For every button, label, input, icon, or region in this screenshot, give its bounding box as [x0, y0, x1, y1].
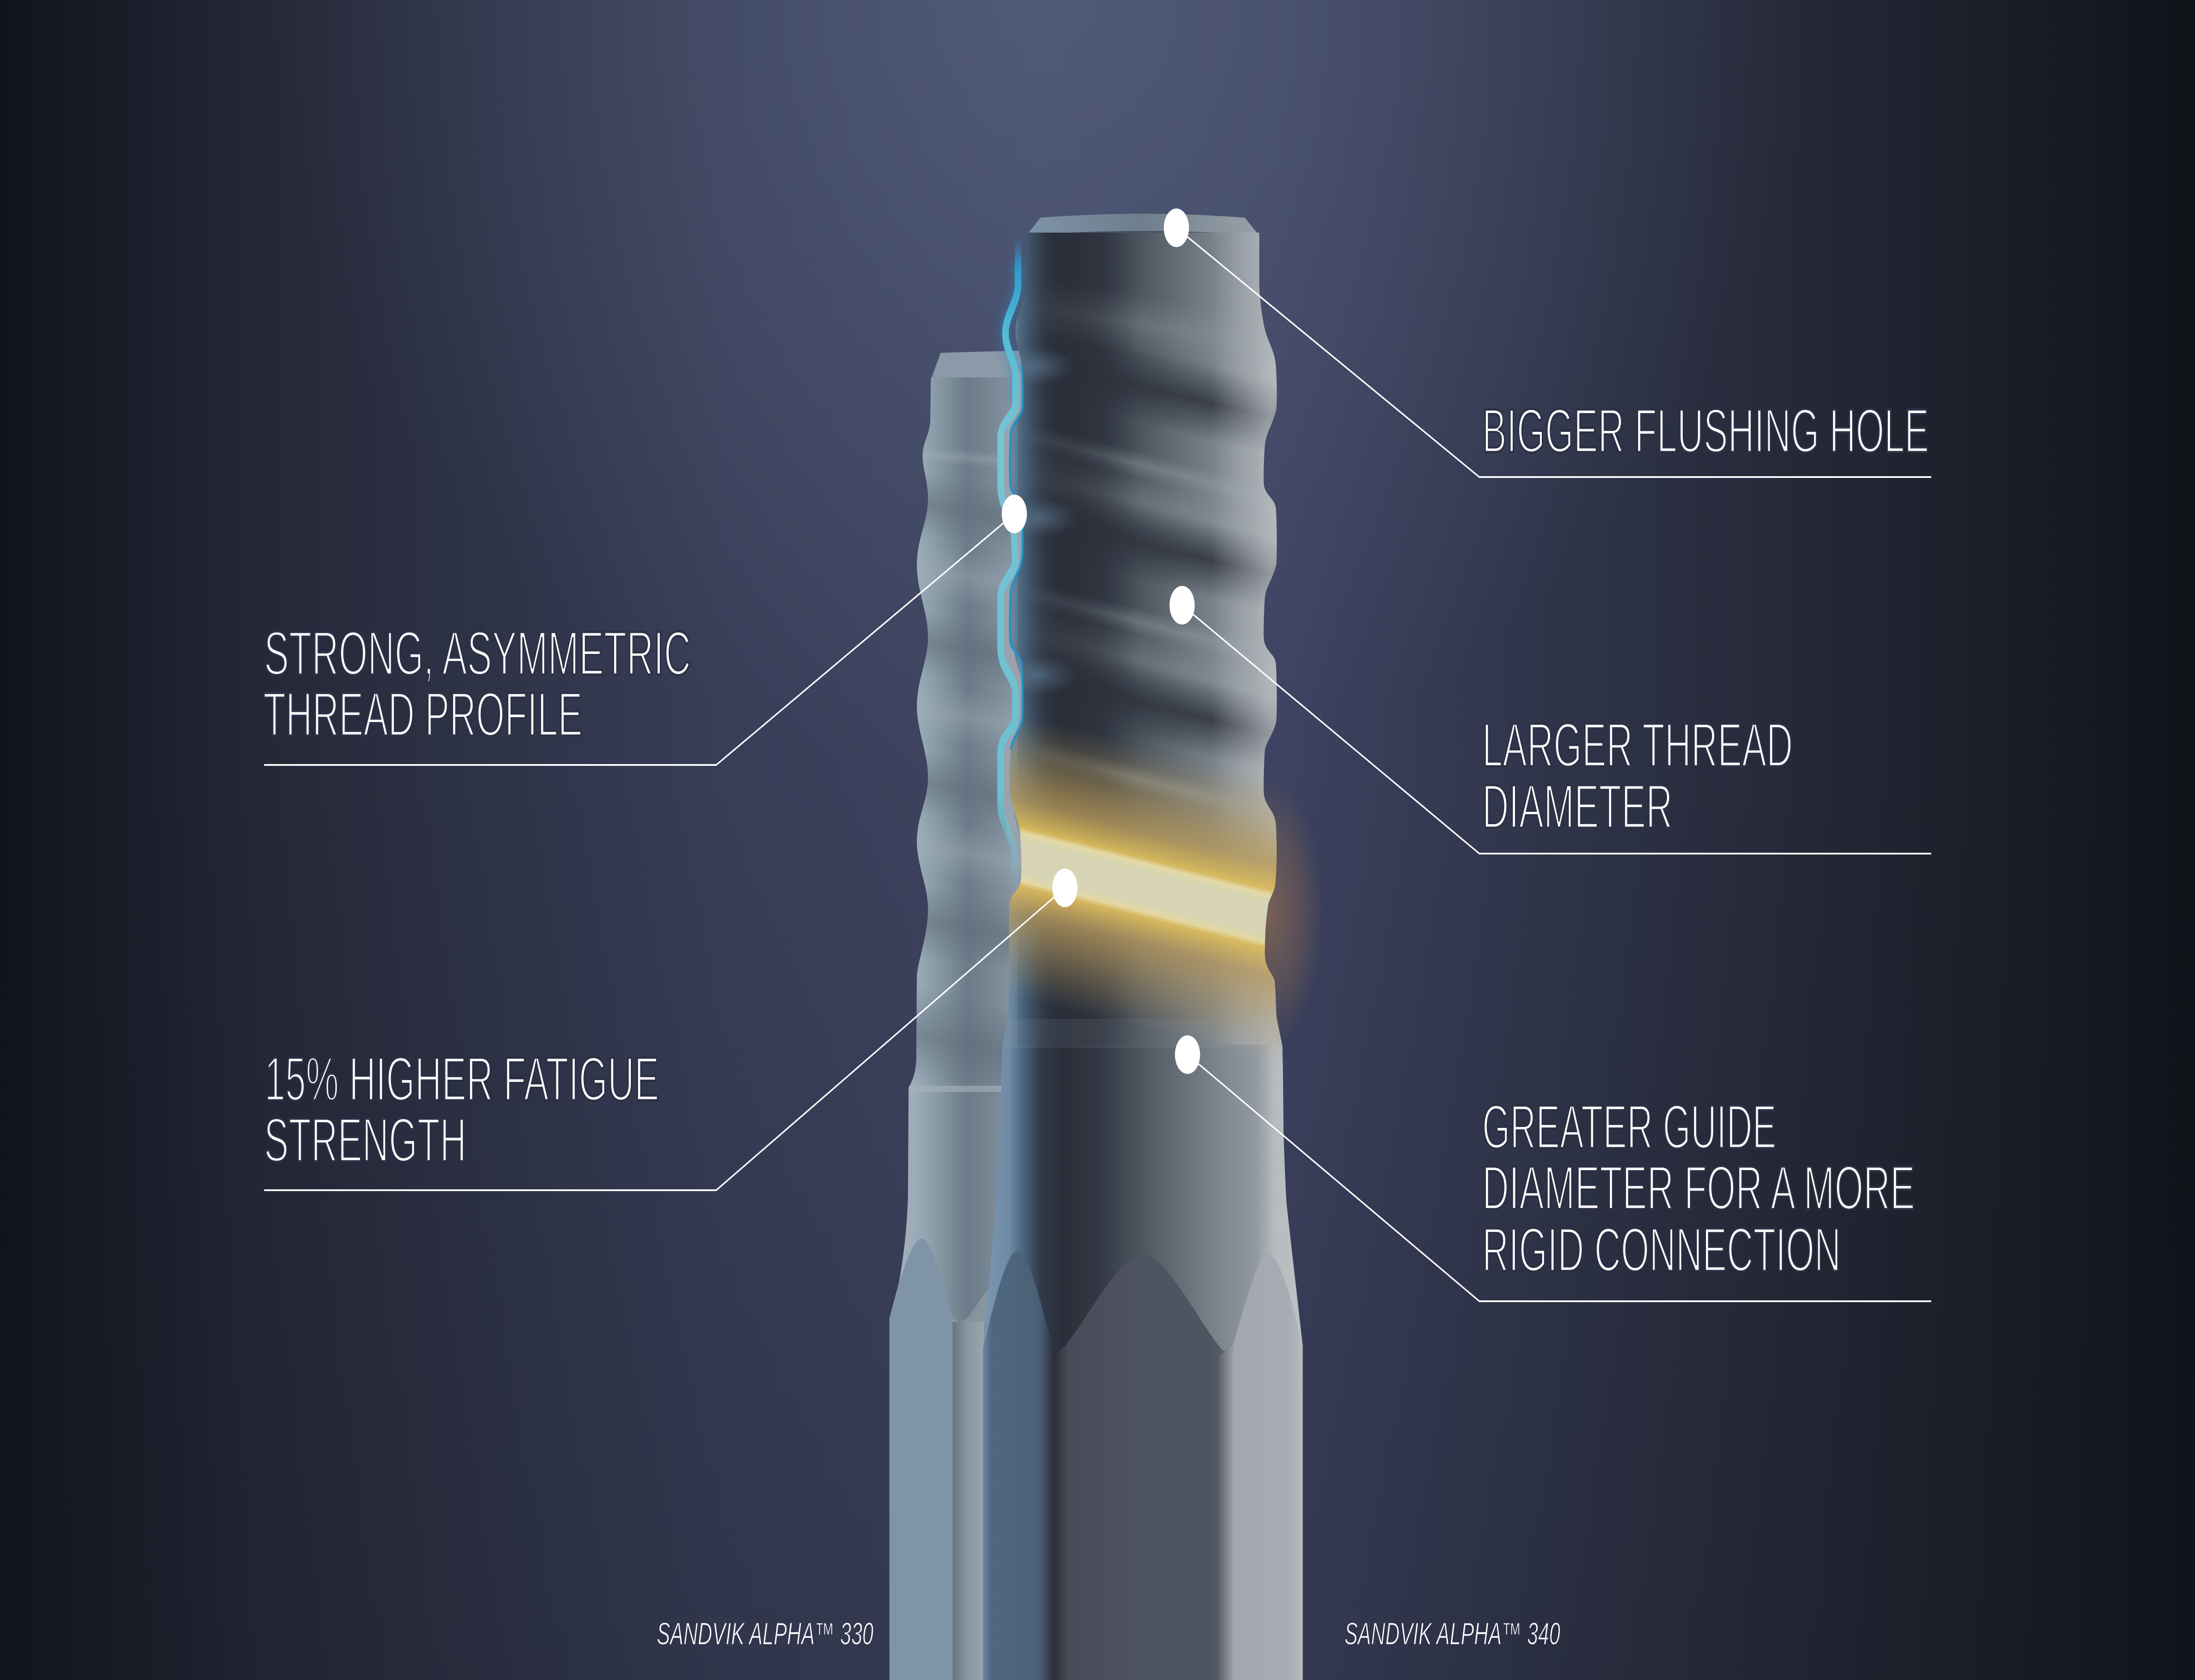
product label: Sandvik Alpha 330: SANDVIK ALPHA™ 330 — [657, 1616, 874, 1651]
callout: strong asymmetric thread profile — [263, 495, 1027, 765]
callout: bigger flushing hole — [1164, 208, 1931, 477]
small drill body — [882, 373, 1050, 1680]
small drill top chamfer — [931, 350, 1029, 380]
label: STRONG, ASYMMETRIC — [264, 619, 691, 688]
small drill hex left face — [889, 1238, 953, 1680]
label: DIAMETER — [1482, 772, 1673, 841]
leader line — [264, 888, 1065, 1190]
small drill flute scallop — [889, 1238, 992, 1325]
thread shading — [970, 233, 1317, 1045]
callout: larger thread diameter — [1169, 586, 1931, 854]
leader line — [1177, 228, 1931, 477]
label — [263, 619, 691, 749]
thread profile glow — [1005, 272, 1018, 395]
label — [264, 1045, 659, 1175]
product label: Sandvik Alpha 340: SANDVIK ALPHA™ 340 — [1344, 1616, 1560, 1651]
highlight: blue thread profile line — [1000, 242, 1023, 891]
marker dot — [1052, 869, 1077, 907]
marker dot — [1175, 1035, 1200, 1074]
grey strip beside profile — [1009, 377, 1023, 860]
leader line — [1182, 605, 1931, 854]
neck collar — [1000, 1019, 1286, 1048]
label — [1482, 1092, 1915, 1285]
hex right face — [1218, 1254, 1303, 1680]
thin blue edge line — [1010, 366, 1022, 749]
thread profile line — [1000, 242, 1018, 891]
callout: 15% higher fatigue strength — [264, 869, 1077, 1190]
callout: greater guide diameter — [1175, 1035, 1931, 1301]
leader line — [1187, 1055, 1931, 1301]
fatigue band and warm glow — [945, 703, 1341, 1072]
label — [1482, 711, 1793, 841]
label: THREAD PROFILE — [263, 680, 583, 749]
label: DIAMETER FOR A MORE — [1482, 1153, 1915, 1223]
label: GREATER GUIDE — [1482, 1092, 1776, 1162]
label: RIGID CONNECTION — [1482, 1215, 1841, 1285]
marker dot — [1002, 495, 1027, 533]
label: 15% HIGHER FATIGUE — [265, 1045, 659, 1114]
small drill hex middle face — [953, 1322, 984, 1680]
drill: Sandvik Alpha 340 — [945, 214, 1341, 1680]
hex left face — [983, 1251, 1058, 1680]
label: BIGGER FLUSHING HOLE — [1482, 396, 1929, 466]
glow: orange halo behind the fatigue band — [1215, 777, 1323, 1049]
marker dot — [1164, 208, 1189, 247]
big drill body — [945, 219, 1341, 1680]
marker dot — [1169, 586, 1195, 625]
leader line — [264, 514, 1015, 765]
hex centre face — [1054, 1254, 1229, 1680]
big drill top chamfer — [1026, 214, 1259, 236]
label: LARGER THREAD — [1482, 711, 1793, 780]
label: STRENGTH — [264, 1106, 467, 1175]
drill: Sandvik Alpha 330 — [889, 350, 1022, 1680]
